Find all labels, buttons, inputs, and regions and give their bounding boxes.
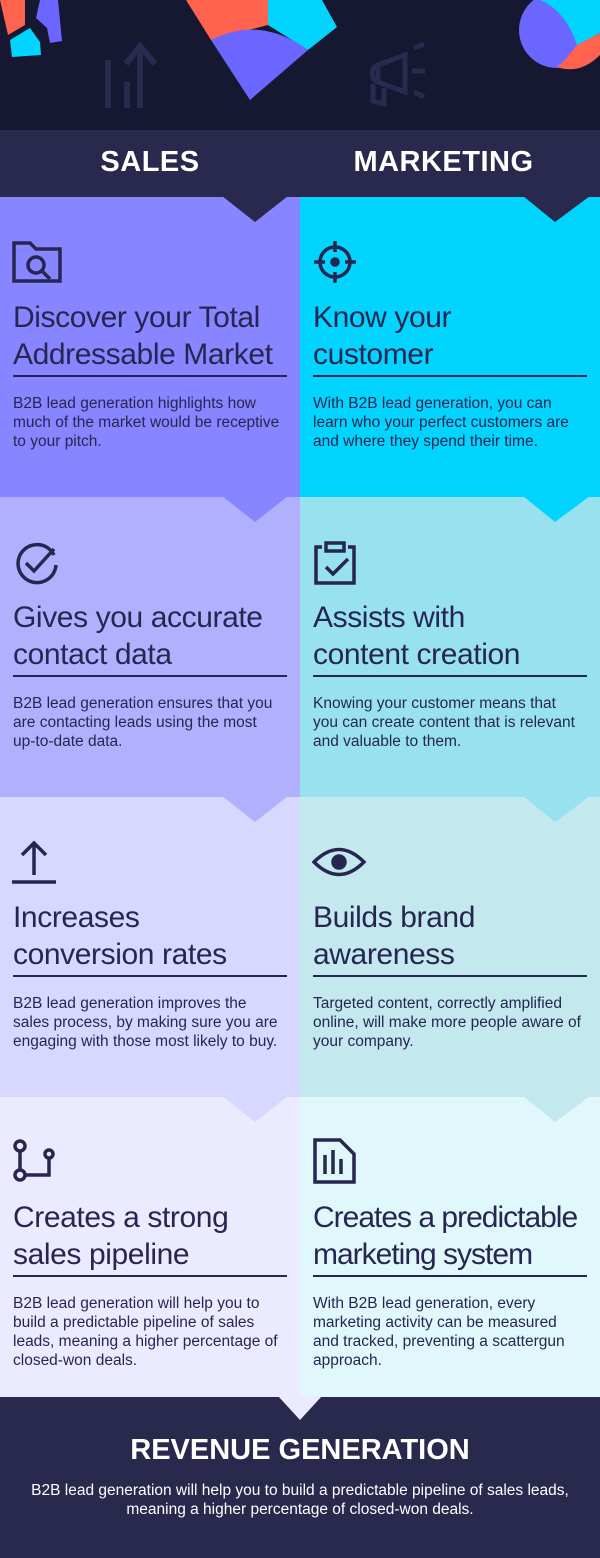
- footer: revenue generation: [31, 1434, 569, 1518]
- text: [13, 995, 277, 1050]
- text: are contacting leads using the most: [13, 714, 257, 731]
- heading: [313, 299, 587, 377]
- text: [313, 395, 569, 450]
- footer text: meaning a higher percentage of closed-won deals.: [126, 1501, 474, 1518]
- panel: brand awareness: [312, 848, 587, 1050]
- heading: customer: [313, 338, 433, 371]
- text: much of the market would be receptive: [13, 414, 279, 431]
- heading: contact data: [13, 638, 172, 671]
- heading: [13, 299, 287, 377]
- footer text: [31, 1482, 569, 1518]
- heading: [313, 1199, 587, 1277]
- heading: conversion rates: [13, 938, 227, 971]
- text: Knowing your customer means that: [313, 695, 556, 712]
- footer text: B2B lead generation will help you to build a predictable pipeline of sales leads,: [31, 1482, 569, 1499]
- heading: Discover your Total: [13, 301, 260, 334]
- text: closed-won deals.: [13, 1352, 137, 1369]
- text: build a predictable pipeline of sales: [13, 1314, 254, 1331]
- panel: contact data: [13, 542, 287, 750]
- heading: Creates a predictable: [313, 1201, 577, 1234]
- header: SALES: SALES: [100, 146, 200, 178]
- heading: Increases: [13, 901, 139, 934]
- icon: folder search: [12, 241, 62, 283]
- text: B2B lead generation highlights how: [13, 395, 256, 412]
- heading: marketing system: [313, 1238, 532, 1271]
- icon: eye: [312, 848, 366, 876]
- text: [313, 1295, 565, 1369]
- heading: Know your: [313, 301, 451, 334]
- text: up-to-date data.: [13, 733, 122, 750]
- text: your company.: [313, 1033, 414, 1050]
- icon: branch: [13, 1139, 55, 1182]
- text: With B2B lead generation, you can: [313, 395, 552, 412]
- text: [313, 995, 581, 1050]
- heading: [13, 1199, 287, 1277]
- text: online, will make more people aware of: [313, 1014, 581, 1031]
- text: sales process, by making sure you are: [13, 1014, 277, 1031]
- footer title: REVENUE GENERATION: [130, 1434, 470, 1466]
- icon: report: [313, 1138, 356, 1184]
- text: B2B lead generation will help you to: [13, 1295, 259, 1312]
- text: B2B lead generation improves the: [13, 995, 247, 1012]
- heading: [13, 899, 287, 977]
- text: and where they spend their time.: [313, 433, 538, 450]
- text: [313, 695, 575, 750]
- panel: content creation: [313, 541, 587, 750]
- icon: target: [314, 241, 356, 283]
- panel: pipeline: [13, 1139, 287, 1369]
- text: to your pitch.: [13, 433, 102, 450]
- text: B2B lead generation ensures that you: [13, 695, 272, 712]
- heading: [13, 599, 287, 677]
- text: you can create content that is relevant: [313, 714, 575, 731]
- heading: Assists with: [313, 601, 465, 634]
- text: leads, meaning a higher percentage of: [13, 1333, 278, 1350]
- icon: clipboard: [314, 541, 356, 585]
- text: marketing activity can be measured: [313, 1314, 557, 1331]
- text: [13, 395, 279, 450]
- text: approach.: [313, 1352, 382, 1369]
- icon: check circle: [16, 542, 58, 584]
- text: With B2B lead generation, every: [313, 1295, 535, 1312]
- text: learn who your perfect customers are: [313, 414, 569, 431]
- text: [13, 695, 272, 750]
- heading: sales pipeline: [13, 1238, 189, 1271]
- text: and valuable to them.: [313, 733, 461, 750]
- text: Targeted content, correctly amplified: [313, 995, 562, 1012]
- panel: know customer: [313, 241, 587, 450]
- panel: predictable marketing: [313, 1138, 587, 1369]
- heading: content creation: [313, 638, 520, 671]
- heading: Creates a strong: [13, 1201, 228, 1234]
- heading: Builds brand: [313, 901, 475, 934]
- text: [13, 1295, 278, 1369]
- panel: TAM: [12, 241, 287, 450]
- heading: Gives you accurate: [13, 601, 263, 634]
- heading: [313, 599, 587, 677]
- heading: Addressable Market: [13, 338, 273, 371]
- header: MARKETING: MARKETING: [353, 146, 534, 178]
- panel: conversion: [12, 840, 287, 1050]
- text: and tracked, preventing a scattergun: [313, 1333, 565, 1350]
- text: engaging with those most likely to buy.: [13, 1033, 277, 1050]
- heading: [313, 899, 587, 977]
- icon: upload arrow: [12, 840, 56, 884]
- heading: awareness: [313, 938, 454, 971]
